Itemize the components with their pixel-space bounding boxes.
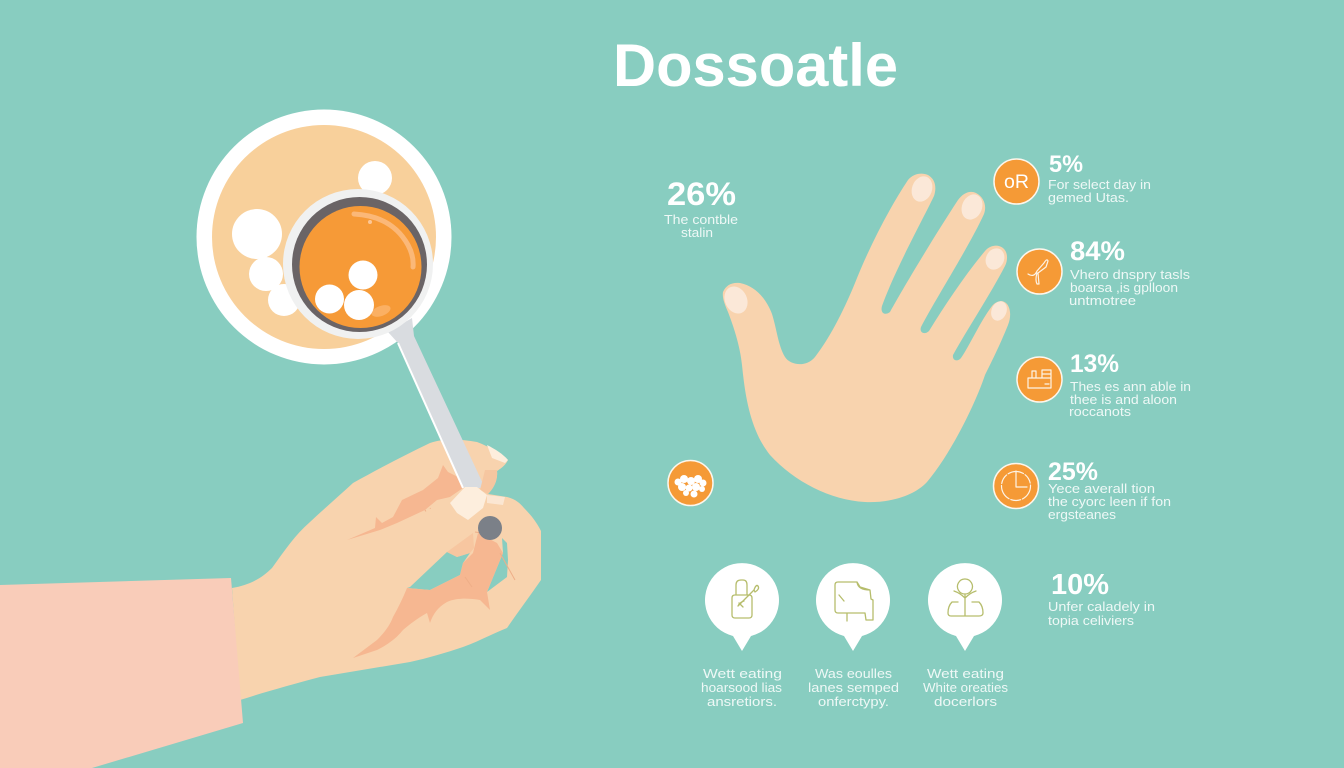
stat: 26%: The contble: [664, 213, 738, 227]
hand front: fingertip, knob and thumb: [410, 445, 508, 570]
stat: 26%: 26%: [667, 176, 736, 212]
stat: 84%: [1017, 236, 1190, 308]
stat: 25%: ergsteanes: [1048, 508, 1116, 522]
magnifier handle: [388, 318, 485, 488]
callout: nail polish: [701, 563, 782, 709]
stat: 26%: [664, 176, 738, 240]
white particles: [232, 161, 392, 316]
icon: white granules badge: [668, 460, 713, 506]
icon: oR badge: [994, 159, 1039, 204]
callout: person: [923, 563, 1008, 709]
shaded lower finger: [353, 533, 503, 658]
stat: 13%: 13%: [1070, 350, 1119, 378]
callout: person: Wett eating: [927, 667, 1004, 681]
stat: 5%: 5%: [1049, 151, 1083, 178]
thumb: [410, 487, 487, 570]
callout: nail polish: Wett eating: [703, 667, 782, 681]
icon: polish bottle pin: [705, 563, 779, 651]
icon: person pin: [928, 563, 1002, 651]
stat: 13%: roccanots: [1069, 405, 1131, 419]
stat: 10%: 10%: [1051, 569, 1109, 601]
sleeve: [0, 578, 243, 768]
hand silhouette: [232, 440, 541, 700]
illustration: magnified view of skin: [196, 110, 485, 488]
icon: branch badge: [1017, 249, 1062, 294]
handle knob: [478, 516, 502, 540]
callout: person: docerlors: [934, 695, 997, 709]
stat: 25%: Yece averall tion: [1048, 482, 1155, 496]
title: Dossoatle: [613, 32, 898, 99]
finger behind thumb: [447, 533, 474, 557]
shaded fold above thumb: [347, 465, 463, 540]
stat: 25%: [994, 458, 1171, 522]
stat: 13%: thee is and aloon: [1070, 393, 1177, 407]
icon: oR badge: oR: [1004, 172, 1029, 193]
callout: document: Was eoulles: [815, 667, 892, 681]
stat: 84%: boarsa ,is gplloon: [1070, 281, 1178, 295]
fingernails: [720, 173, 1010, 323]
callout: nail polish: ansretiors.: [707, 695, 777, 709]
callout: document: onferctypy.: [818, 695, 889, 709]
callout: nail polish: hoarsood lias: [701, 681, 782, 695]
gap between thumb and fingers: [407, 552, 470, 590]
callout: person: White oreaties: [923, 681, 1008, 695]
icon: document pin: [816, 563, 890, 651]
fingernails: [487, 445, 508, 463]
callout: document: [808, 563, 899, 709]
callout: document: lanes semped: [808, 681, 899, 695]
stat: 5%: [994, 151, 1151, 205]
stat: 84%: 84%: [1070, 236, 1125, 266]
icon: folder badge: [1017, 357, 1062, 402]
stat: 13%: [1017, 350, 1191, 419]
stat: 5%: gemed Utas.: [1048, 191, 1129, 205]
icon: clock badge: [994, 464, 1038, 508]
stat: 25%: the cyorc leen if fon: [1048, 495, 1171, 509]
stat: 26%: stalin: [681, 226, 713, 240]
gap beside outer finger: [487, 538, 508, 592]
stat: 84%: Vhero dnspry tasls: [1070, 268, 1190, 282]
crease lines: [425, 508, 515, 587]
lens backdrop circle: [196, 110, 452, 364]
stat: 10%: [1048, 569, 1155, 628]
stat: 84%: untmotree: [1069, 294, 1136, 308]
open hand illustration: [720, 173, 1010, 502]
stat: 5%: For select day in: [1048, 178, 1151, 192]
stat: 25%: 25%: [1048, 458, 1098, 486]
index finger shadow: [480, 470, 497, 494]
stat: 10%: Unfer caladely in: [1048, 600, 1155, 614]
magnifier lens: [283, 189, 433, 339]
left hand holding magnifier: [232, 440, 541, 700]
stat: 13%: Thes es ann able in: [1070, 380, 1191, 394]
stat: 10%: topia celiviers: [1048, 614, 1134, 628]
